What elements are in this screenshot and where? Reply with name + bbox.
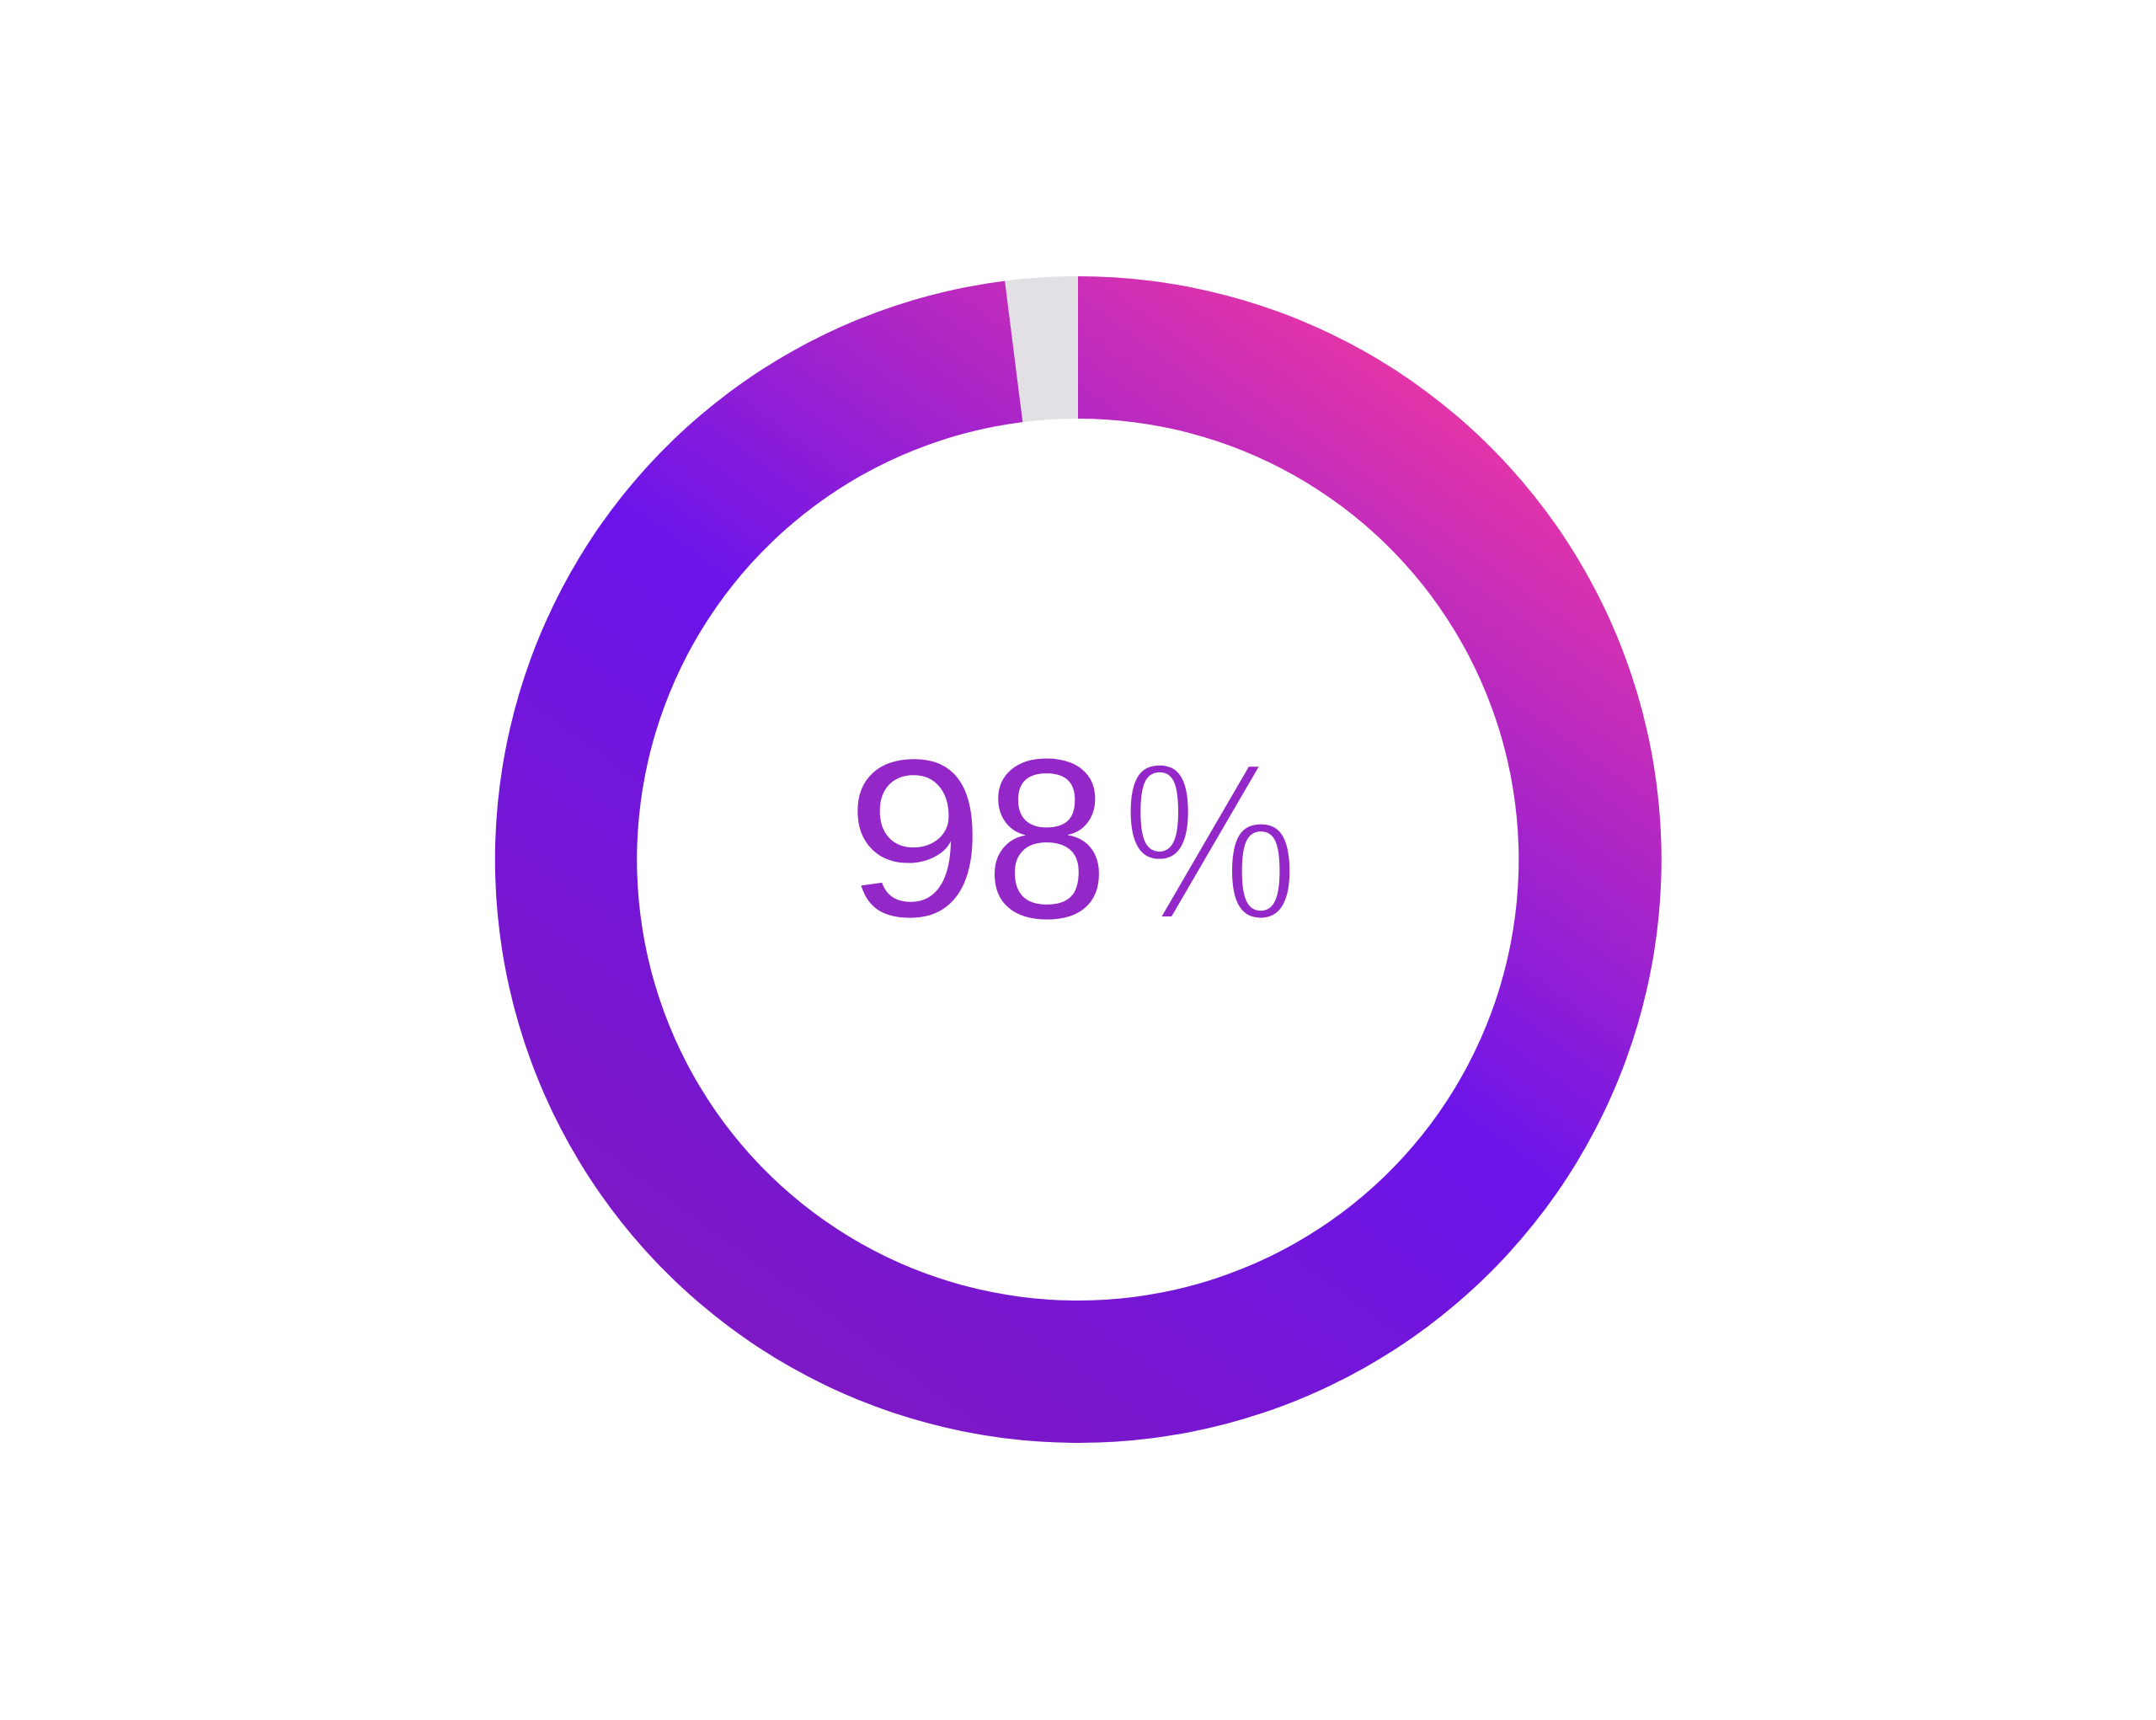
ring segment: 98 percent gradient arc [495,276,1662,1443]
digit 9: 9 [846,713,985,964]
ring segment: remaining 2 percent [1005,276,1078,422]
digit 8: 8 [985,711,1108,966]
center value: 98% [846,711,1299,967]
percent sign: % [1122,715,1299,967]
